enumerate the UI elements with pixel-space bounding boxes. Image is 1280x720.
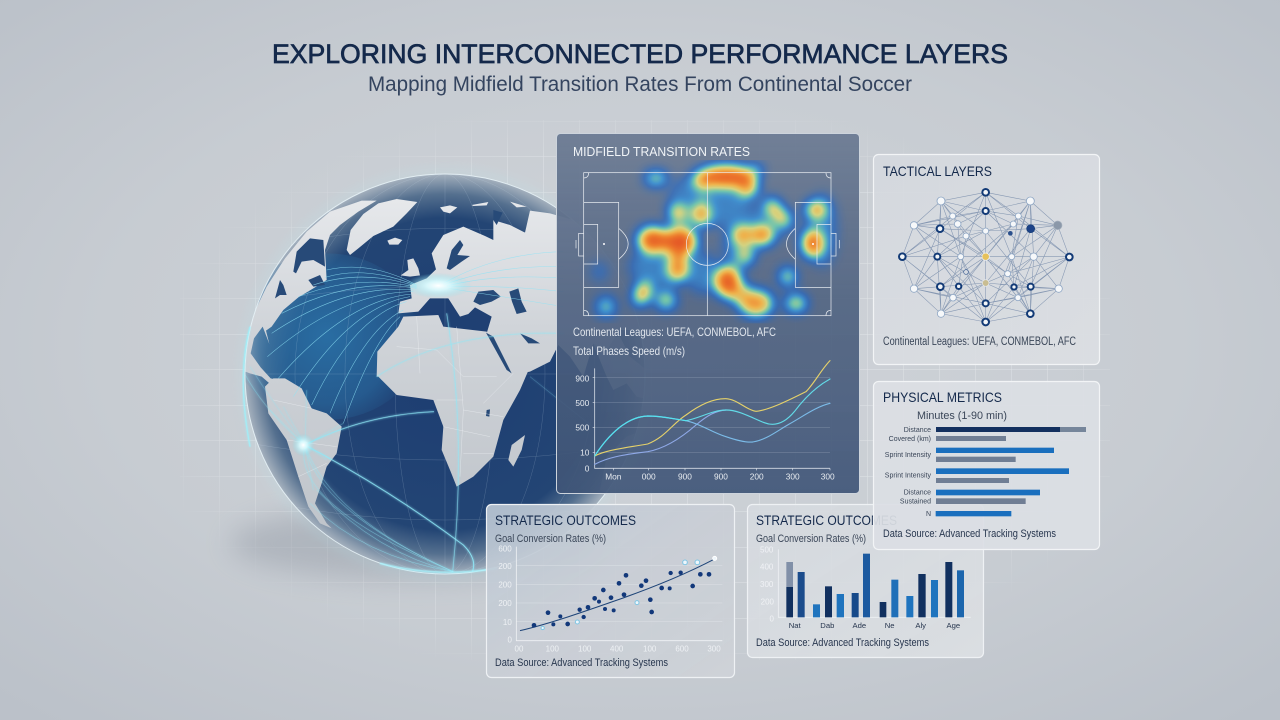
greenland: [347, 199, 417, 255]
data source: Data Source: Advanced Tracking Systems: [495, 657, 668, 669]
panel heading: STRATEGIC OUTCOMES: [495, 512, 636, 528]
y axis labels: 300: [760, 580, 774, 589]
scatter plot: [498, 544, 722, 653]
x axis labels: Age: [947, 621, 960, 630]
bar labels: N: [926, 511, 931, 518]
network edges: [902, 192, 1069, 322]
x axis labels: 100: [643, 644, 657, 653]
panel heading: PHYSICAL METRICS: [883, 389, 1002, 405]
dark ring nodes: [899, 189, 1073, 325]
globe: [230, 172, 650, 580]
panel heading: TACTICAL LAYERS: [883, 163, 992, 179]
curves: [595, 361, 830, 464]
south america: [265, 378, 342, 528]
globe rim: [245, 174, 645, 574]
heatmap pitch: [576, 165, 839, 316]
pitch markings: [576, 173, 839, 316]
trend line: [520, 559, 714, 631]
globe halo: [243, 172, 647, 576]
x axis labels: 100: [546, 644, 560, 653]
x axis labels: 000: [642, 472, 656, 482]
title: EXPLORING INTERCONNECTED PERFORMANCE LAYERS: [272, 39, 1008, 69]
globe shadow: [230, 507, 603, 580]
y axis labels: 0: [769, 614, 774, 623]
data source: Data Source: Advanced Tracking Systems: [756, 637, 929, 649]
x axis labels: 00: [515, 644, 524, 653]
horizontal bar chart: [885, 427, 1086, 518]
x axis labels: 200: [750, 472, 764, 482]
y axis labels: 200: [761, 598, 775, 607]
network diagram: [899, 189, 1073, 325]
y axis labels: 400: [760, 563, 774, 572]
y axis labels: 10: [580, 447, 590, 457]
data source: Data Source: Advanced Tracking Systems: [883, 528, 1056, 540]
y axis labels: 200: [498, 562, 512, 571]
africa: [377, 315, 528, 487]
x axis labels: Nat: [789, 621, 801, 630]
bar labels: Sprint Intensity: [885, 472, 932, 479]
bar labels: [885, 427, 932, 518]
north america: [240, 201, 377, 387]
panel: midfield transition rates: [556, 134, 860, 494]
graticule: [247, 174, 565, 571]
x axis labels: 300: [821, 472, 835, 482]
x axis labels: 400: [610, 644, 624, 653]
bar labels: Distance: [904, 490, 931, 497]
bar labels: Sprint Intensity: [885, 452, 932, 459]
x axis labels: 900: [714, 472, 728, 482]
y axis labels: 600: [498, 544, 512, 553]
australia: [600, 430, 647, 497]
iceland: [387, 238, 402, 245]
europe fan arcs: [267, 252, 563, 423]
y axis labels: 0: [507, 636, 512, 645]
leagues caption: Continental Leagues: UEFA, CONMEBOL, AFC: [883, 336, 1076, 348]
y axis labels: 200: [498, 599, 512, 608]
x axis labels: 100: [578, 644, 592, 653]
flare: south america: [293, 435, 314, 455]
x axis labels: 600: [675, 644, 689, 653]
chart heading: Minutes (1-90 min): [917, 410, 1007, 422]
svalbard: [440, 205, 457, 213]
eurasia: [398, 211, 643, 377]
x axis labels: 900: [678, 472, 692, 482]
bar labels: Covered (km): [889, 436, 931, 443]
x axis labels: [605, 472, 835, 482]
y axis labels: 0: [585, 463, 590, 473]
x axis labels: 300: [786, 472, 800, 482]
y axis labels: 200: [498, 580, 512, 589]
y axis labels: [575, 373, 590, 473]
atlantic highlight: [246, 254, 412, 420]
leagues caption: Continental Leagues: UEFA, CONMEBOL, AFC: [573, 325, 776, 339]
y axis labels: 500: [575, 398, 590, 408]
panel: physical metrics: [874, 382, 1100, 550]
x axis labels: Ade: [853, 621, 866, 630]
y axis labels: [760, 545, 775, 623]
x axis labels: 300: [707, 644, 721, 653]
x axis labels: [789, 621, 960, 630]
chart heading: Goal Conversion Rates (%): [495, 533, 606, 545]
line chart: [575, 361, 835, 482]
british isles: [401, 258, 420, 277]
hudson bay and inland seas: [275, 210, 540, 417]
flare: europe: [406, 274, 470, 298]
panel: tactical layers: [874, 154, 1100, 364]
x axis labels: Dab: [820, 621, 834, 630]
data points: [532, 570, 711, 628]
y axis labels: 500: [760, 545, 774, 554]
panel heading: STRATEGIC OUTCOMES: [756, 512, 897, 528]
filled and accent nodes: [964, 221, 1062, 286]
y axis labels: [498, 544, 512, 645]
y axis labels: 900: [575, 373, 590, 383]
globe body: [245, 174, 645, 574]
light nodes: [910, 197, 1062, 317]
x axis labels: Mon: [605, 472, 622, 482]
panel heading: MIDFIELD TRANSITION RATES: [573, 144, 750, 159]
y axis labels: 500: [575, 422, 590, 432]
speed chart heading: Total Phases Speed (m/s): [573, 344, 685, 358]
panel: strategic outcomes scatter: [486, 504, 734, 678]
x axis labels: Ne: [885, 621, 895, 630]
bar chart: [760, 545, 971, 630]
bars: [786, 554, 964, 617]
x axis labels: Aly: [915, 621, 926, 630]
x axis labels: [515, 644, 721, 653]
madagascar: [508, 435, 525, 467]
bar labels: Sustained: [900, 499, 931, 506]
heatmap: [591, 165, 836, 316]
continents: [240, 199, 650, 528]
long distance arcs: [246, 312, 556, 572]
panel: strategic outcomes bars: [748, 504, 984, 658]
bar labels: Distance: [904, 427, 931, 434]
chart heading: Goal Conversion Rates (%): [756, 533, 866, 545]
subtitle: Mapping Midfield Transition Rates From Continental Soccer: [368, 73, 912, 96]
bars: [936, 427, 1086, 516]
y axis labels: 10: [503, 618, 512, 627]
highlighted points: [541, 556, 717, 630]
india and southeast asia: [594, 337, 629, 390]
african borders: [273, 317, 513, 477]
